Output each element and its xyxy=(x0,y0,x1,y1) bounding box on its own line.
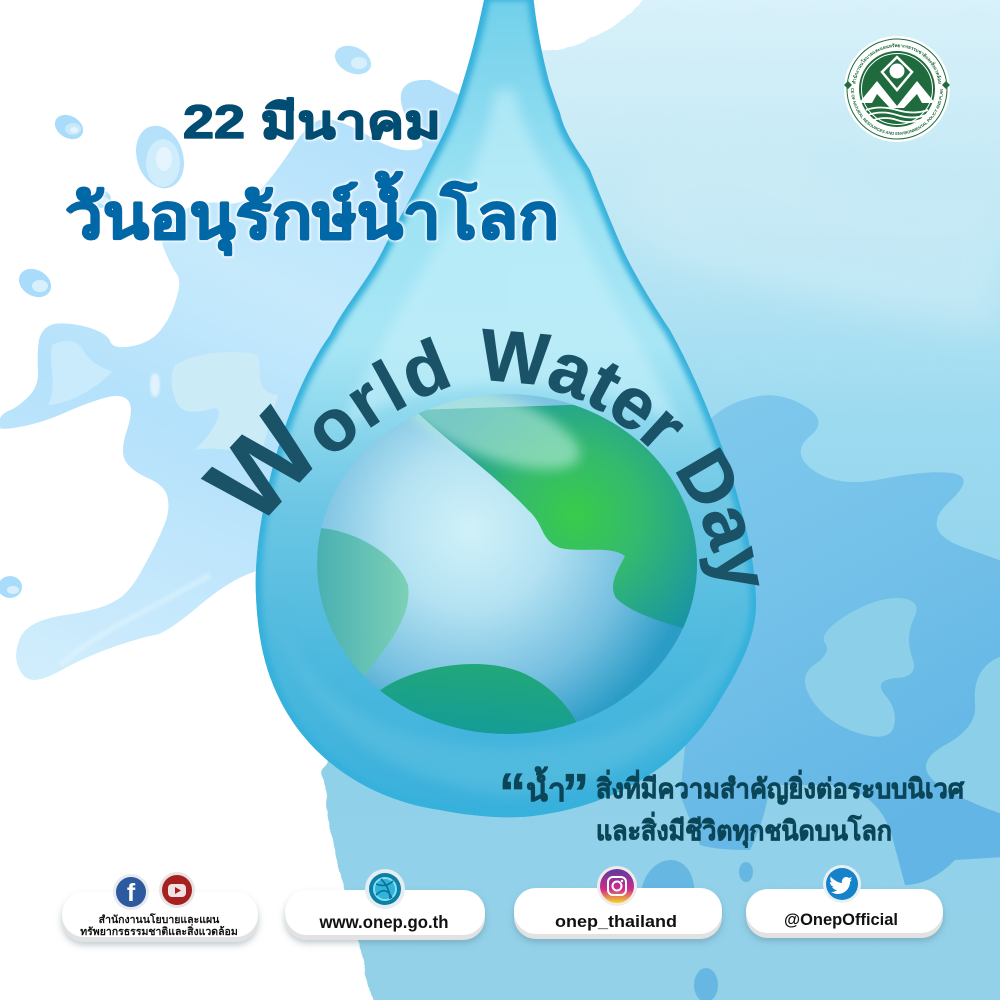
title: World Water Conservation Day in Thai: วันอนุรักษ์น้ำโลก xyxy=(65,171,559,255)
logo: ONEP seal xyxy=(844,36,950,142)
title: date: 22 มีนาคม xyxy=(183,95,441,148)
tagline: น้ำ xyxy=(526,766,566,808)
contact pill: twitter: @OnepOfficial xyxy=(784,911,898,929)
land: north continent xyxy=(418,404,697,628)
globe xyxy=(317,394,697,734)
land: south continent xyxy=(380,664,576,734)
splash: left water splash xyxy=(0,40,470,680)
contact pill: instagram xyxy=(514,866,722,939)
icon: facebook xyxy=(113,874,149,910)
icon: youtube xyxy=(159,872,195,908)
land: west continent xyxy=(317,528,408,676)
icon: globe xyxy=(365,869,405,909)
tagline: ” xyxy=(562,763,589,823)
contact pill: website: www.onep.go.th xyxy=(319,912,448,932)
icon: instagram xyxy=(597,866,637,906)
small droplets bottom xyxy=(640,860,753,1000)
icon: twitter xyxy=(823,865,861,903)
tagline: สิ่งที่มีความสำคัญยิ่งต่อระบบนิเวศ xyxy=(596,769,965,805)
droplet xyxy=(51,110,87,144)
tagline: “ xyxy=(499,763,526,823)
contact pill: agency: สำนักงานนโยบายและแผน xyxy=(99,913,220,926)
droplet xyxy=(14,263,56,303)
icon: facebook: f xyxy=(127,879,136,907)
curved title: World Water Day: World Water Day xyxy=(200,328,760,586)
contact pill: instagram: onep_thailand xyxy=(555,912,677,931)
contact pill: twitter xyxy=(746,865,943,938)
tagline: และสิ่งมีชีวิตทุกชนิดบนโลก xyxy=(596,811,892,848)
contact pill: agency xyxy=(62,872,258,942)
background: right darker splash xyxy=(680,395,1000,885)
droplet xyxy=(128,119,192,195)
background: blue watercolor wash xyxy=(322,0,1000,1000)
logo: ONEP seal: สำนักงานนโยบายและแผนทรัพยากรธรรมชาติและสิ่งแวดล้อม xyxy=(852,43,942,84)
contact pill: agency: ทรัพยากรธรรมชาติและสิ่งแวดล้อม xyxy=(80,923,238,938)
contact pill: website xyxy=(285,869,485,940)
water drop xyxy=(256,0,756,817)
highlight on north continent xyxy=(410,394,586,476)
tagline xyxy=(499,763,965,848)
droplet xyxy=(330,40,376,80)
droplet xyxy=(89,190,111,208)
droplet xyxy=(0,576,22,598)
